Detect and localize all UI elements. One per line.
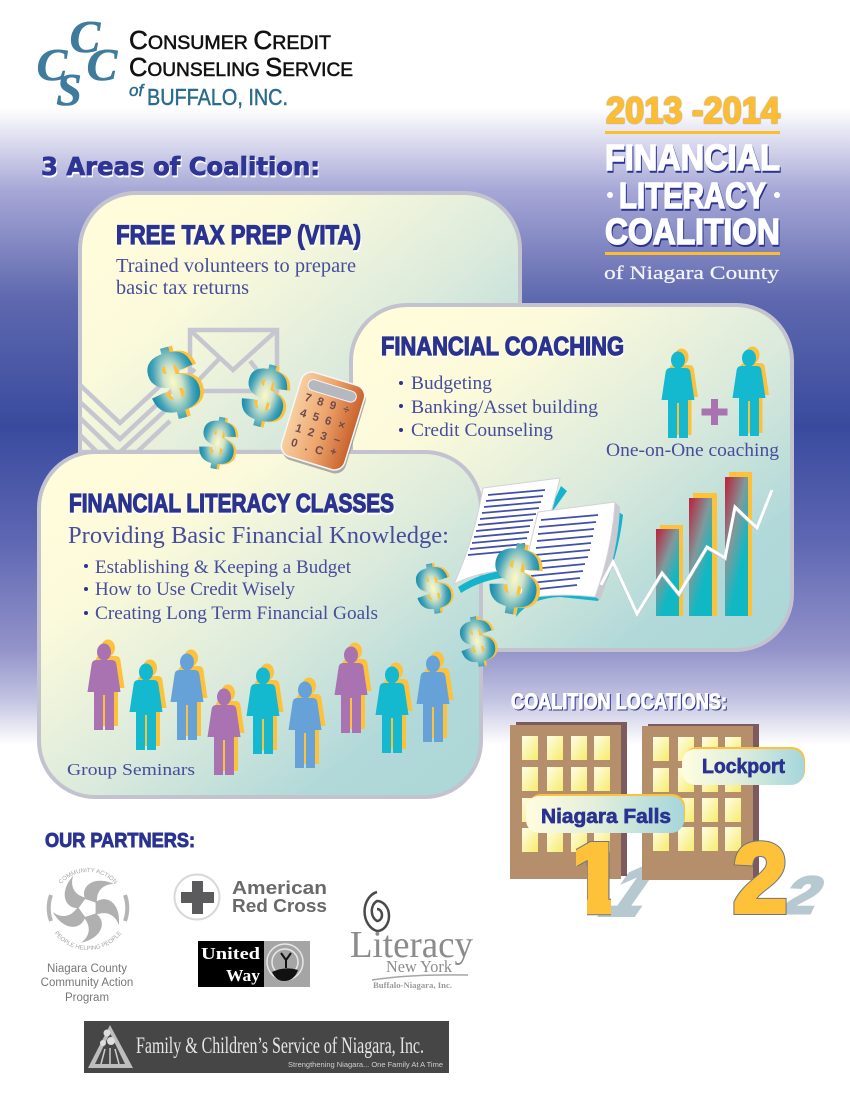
- heading: our partners: OUR PARTNERS:: [45, 830, 195, 852]
- icon: dollar sign lower: $: [458, 606, 501, 676]
- logo: Family & Children's Service banner: Family & Children’s Service of Niagara, Inc.: [136, 1033, 424, 1058]
- icon: calculator: [278, 369, 369, 476]
- coalition name: COALITION: [605, 211, 780, 252]
- numeral 1: 1: [564, 824, 627, 933]
- of Buffalo, Inc.: of: [129, 81, 145, 100]
- icon: group of people: [88, 640, 454, 775]
- calculator keys: 7: [303, 392, 313, 405]
- building: Lockport: [642, 724, 759, 880]
- agency name: [41, 963, 133, 1004]
- family icon: [88, 1025, 133, 1068]
- windows: [653, 737, 741, 851]
- building: Niagara Falls: [510, 722, 627, 879]
- swirl emblem: COMMUNITY ACTION: [58, 868, 118, 884]
- calculator keys: ×: [336, 419, 347, 432]
- caption: one-on-one: One-on-One coaching: [606, 440, 780, 461]
- numeral 1: [576, 841, 611, 916]
- icon: dollar sign large: $: [142, 330, 212, 432]
- heading: free tax prep: FREE TAX PREP (VITA): [116, 220, 361, 250]
- years: 2013 -2014: [606, 90, 780, 131]
- coaching list: Budgeting: [411, 373, 493, 394]
- numeral 2: 2: [733, 823, 788, 933]
- text lines right: [529, 515, 598, 590]
- logo: Literacy New York: New York: [386, 957, 452, 976]
- logo mark: [37, 11, 119, 115]
- icon: dollar sign right: $: [235, 351, 295, 440]
- logo mark: S: [56, 64, 82, 115]
- left page: [454, 478, 560, 584]
- calculator keys: 5: [311, 411, 321, 425]
- county: of Niagara County: [604, 263, 780, 284]
- title block: [604, 90, 780, 284]
- description: tax prep: basic tax returns: [116, 278, 249, 299]
- icon: dollar sign on book: $: [488, 530, 549, 628]
- calculator keys: 1: [294, 423, 304, 436]
- calculator keys: .: [303, 441, 310, 454]
- calculator keys: 8: [316, 396, 326, 409]
- number shadows: 2: [773, 866, 834, 924]
- logo: United Way: Way: [226, 966, 261, 985]
- icon: dollar sign small: $: [198, 407, 243, 479]
- icon: dollar sign large: $: [138, 331, 208, 433]
- calculator keys: 4: [298, 407, 309, 421]
- number shadows: [585, 850, 834, 931]
- logo: Literacy New York: Buffalo-Niagara, Inc.: [373, 981, 452, 990]
- subheading: Providing Basic Financial Knowledge:: [68, 523, 449, 549]
- logo mark: C: [70, 11, 102, 62]
- description: tax prep: [116, 256, 356, 299]
- calculator keys: +: [328, 446, 339, 459]
- panel: free tax prep: [80, 193, 520, 553]
- icon: one-on-one people: [662, 346, 769, 438]
- label: Niagara Falls: [526, 794, 685, 833]
- coalition name: LITERACY: [619, 175, 766, 216]
- calculator keys: ÷: [341, 404, 352, 417]
- heading: literacy classes: FINANCIAL LITERACY CLASSES: [69, 488, 394, 518]
- logo: Family & Children's Service banner: [84, 1021, 449, 1073]
- icon: dollar sign lower: $: [456, 607, 499, 676]
- logo: CCCS Buffalo: [37, 11, 353, 115]
- logo: American Red Cross: [174, 874, 327, 920]
- bar chart: [601, 472, 772, 616]
- calculator keys: C: [313, 444, 325, 458]
- company name: [129, 25, 353, 82]
- swirl emblem: PEOPLE HELPING PEOPLE: [54, 931, 122, 950]
- coaching list: Credit Counseling: [411, 420, 553, 441]
- icon: open book: [454, 478, 623, 617]
- logo mark: C: [87, 39, 119, 90]
- description: tax prep: Trained volunteers to prepare: [116, 256, 356, 277]
- number shadows: 1: [585, 850, 681, 931]
- panel: financial coaching: [351, 305, 792, 650]
- classes list: Establishing & Keeping a Budget: [95, 557, 352, 578]
- icon: dollar sign classes: $: [414, 553, 457, 623]
- caption: group seminars: Group Seminars: [67, 760, 195, 779]
- logo: American Red Cross: Red Cross: [232, 896, 327, 916]
- right page: [595, 502, 620, 600]
- calculator keys: [289, 392, 352, 462]
- logo: Literacy New York: [350, 892, 473, 990]
- icon: dollar sign right: $: [238, 352, 298, 441]
- coalition name: [605, 137, 780, 252]
- label: Niagara Falls: Niagara Falls: [541, 806, 671, 828]
- trend line: [601, 490, 772, 615]
- logo: Literacy New York: Literacy: [350, 924, 473, 966]
- calculator keys: 0: [289, 437, 299, 450]
- coaching list: [399, 373, 599, 441]
- heading: 3 areas of coalition: 3 Areas of Coalition:: [41, 152, 320, 181]
- agency name: Community Action: [41, 977, 133, 989]
- windows: [522, 736, 610, 852]
- agency name: Niagara County: [47, 963, 127, 975]
- logo: United Way: [198, 941, 310, 987]
- icon: dollar sign on book: $: [485, 530, 545, 627]
- calculator keys: −: [332, 434, 342, 448]
- coalition name: FINANCIAL: [605, 137, 780, 178]
- calculator keys: 9: [328, 400, 338, 413]
- numeral 2: 2: [733, 823, 788, 933]
- icon: envelope: [80, 330, 360, 452]
- agency name: Program: [65, 992, 109, 1004]
- label: Lockport: Lockport: [702, 756, 785, 778]
- swirl emblem: [46, 868, 130, 950]
- logo: Niagara County Community Action: [41, 868, 133, 1004]
- logo: Family & Children's Service banner: Strengthening Niagara... One Family At A Time: [288, 1060, 443, 1069]
- calculator keys: 2: [306, 426, 316, 440]
- of Buffalo, Inc.: BUFFALO, INC.: [147, 84, 288, 110]
- panel: financial literacy classes: [39, 452, 481, 797]
- classes list: Creating Long Term Financial Goals: [95, 603, 378, 624]
- heading: financial coaching: FINANCIAL COACHING: [381, 331, 624, 361]
- icon: dollar sign classes: $: [412, 554, 455, 623]
- numeral 1: 1: [564, 824, 627, 933]
- teal book cover: [458, 570, 532, 593]
- text lines left: [468, 490, 545, 555]
- logo: United Way: United: [201, 944, 261, 963]
- company name: CONSUMER CREDIT: [129, 25, 331, 55]
- logo: American Red Cross: American: [232, 878, 327, 898]
- company name: COUNSELING SERVICE: [129, 52, 353, 82]
- classes list: [84, 557, 378, 624]
- logo mark: C: [37, 39, 69, 90]
- calculator keys: 3: [319, 430, 328, 443]
- label: Lockport: [682, 747, 805, 785]
- heading: coalition locations: COALITION LOCATIONS:: [511, 689, 727, 714]
- coaching list: Banking/Asset building: [411, 397, 599, 418]
- calculator keys: 6: [323, 415, 333, 428]
- icon: dollar sign small: $: [196, 407, 240, 478]
- classes list: How to Use Credit Wisely: [95, 579, 295, 600]
